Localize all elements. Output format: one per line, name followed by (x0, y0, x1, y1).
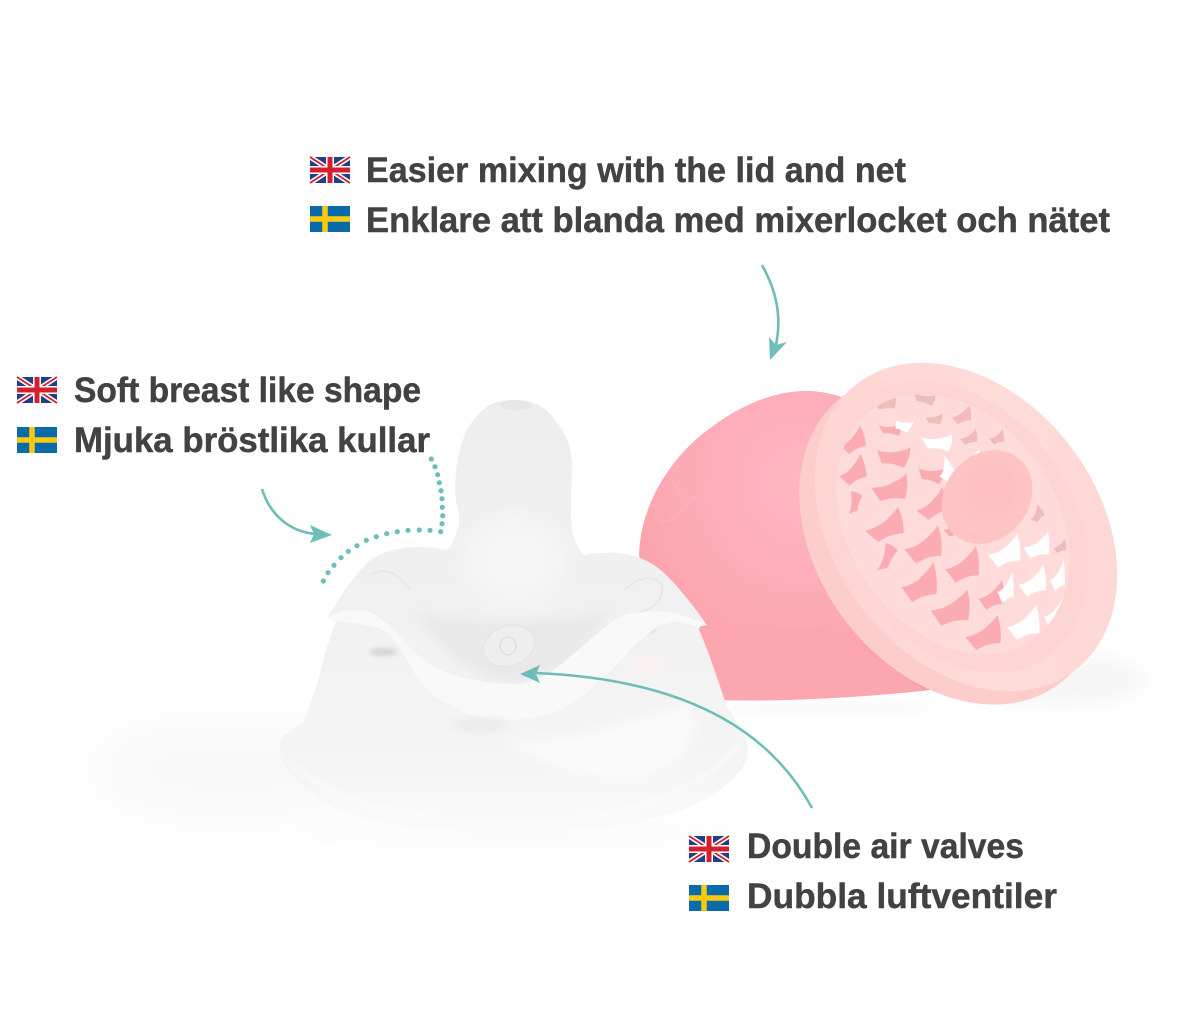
arrow: mixing lid callout (762, 265, 787, 360)
heading: valves English: Double air valves (747, 827, 1024, 866)
net mesh (788, 350, 1118, 698)
silicone teat (279, 400, 747, 833)
white openings (896, 420, 1065, 640)
dome flange (696, 628, 925, 700)
wavy shoulder band (327, 610, 707, 720)
soft product shadows (80, 654, 1150, 847)
callout: mixing lid (310, 151, 1110, 240)
heading: mixing English: Easier mixing with the lid and net (366, 151, 906, 190)
heading: shape English: Soft breast like shape (74, 371, 421, 410)
pink openings (839, 426, 1004, 650)
callout: air valves (689, 827, 1057, 916)
mixer lid dome (pink) (639, 391, 930, 700)
flag: UK (689, 836, 729, 862)
callout: breast shape (17, 371, 430, 460)
flag: Sweden (17, 427, 57, 453)
flag: Sweden (689, 885, 729, 911)
valley shading (415, 610, 610, 684)
heading: shape Swedish: Mjuka bröstlika kullar (74, 421, 430, 460)
arrow: double air valves callout (520, 665, 812, 808)
flag: UK (17, 377, 57, 403)
flag: Sweden (310, 206, 350, 232)
teat body (279, 400, 747, 833)
shoulder folds (371, 571, 663, 612)
shaded openings (872, 385, 1066, 553)
rim skirt (736, 316, 1166, 764)
flag: UK (310, 157, 350, 183)
air valve (478, 618, 540, 674)
dotted contour: breast shape (321, 456, 445, 584)
dome body (639, 391, 930, 700)
outer rim (752, 304, 1180, 750)
nipple soft highlight (465, 515, 565, 605)
lid net and rim (799, 362, 1118, 704)
heading: mixing Swedish: Enklare att blanda med mixerlocket och nätet (366, 201, 1110, 240)
base highlights (510, 700, 694, 780)
heading: valves Swedish: Dubbla luftventiler (747, 877, 1057, 916)
arrow: breast shape callout (262, 489, 332, 543)
lid knob (923, 432, 1051, 562)
teat top opening (500, 400, 532, 410)
